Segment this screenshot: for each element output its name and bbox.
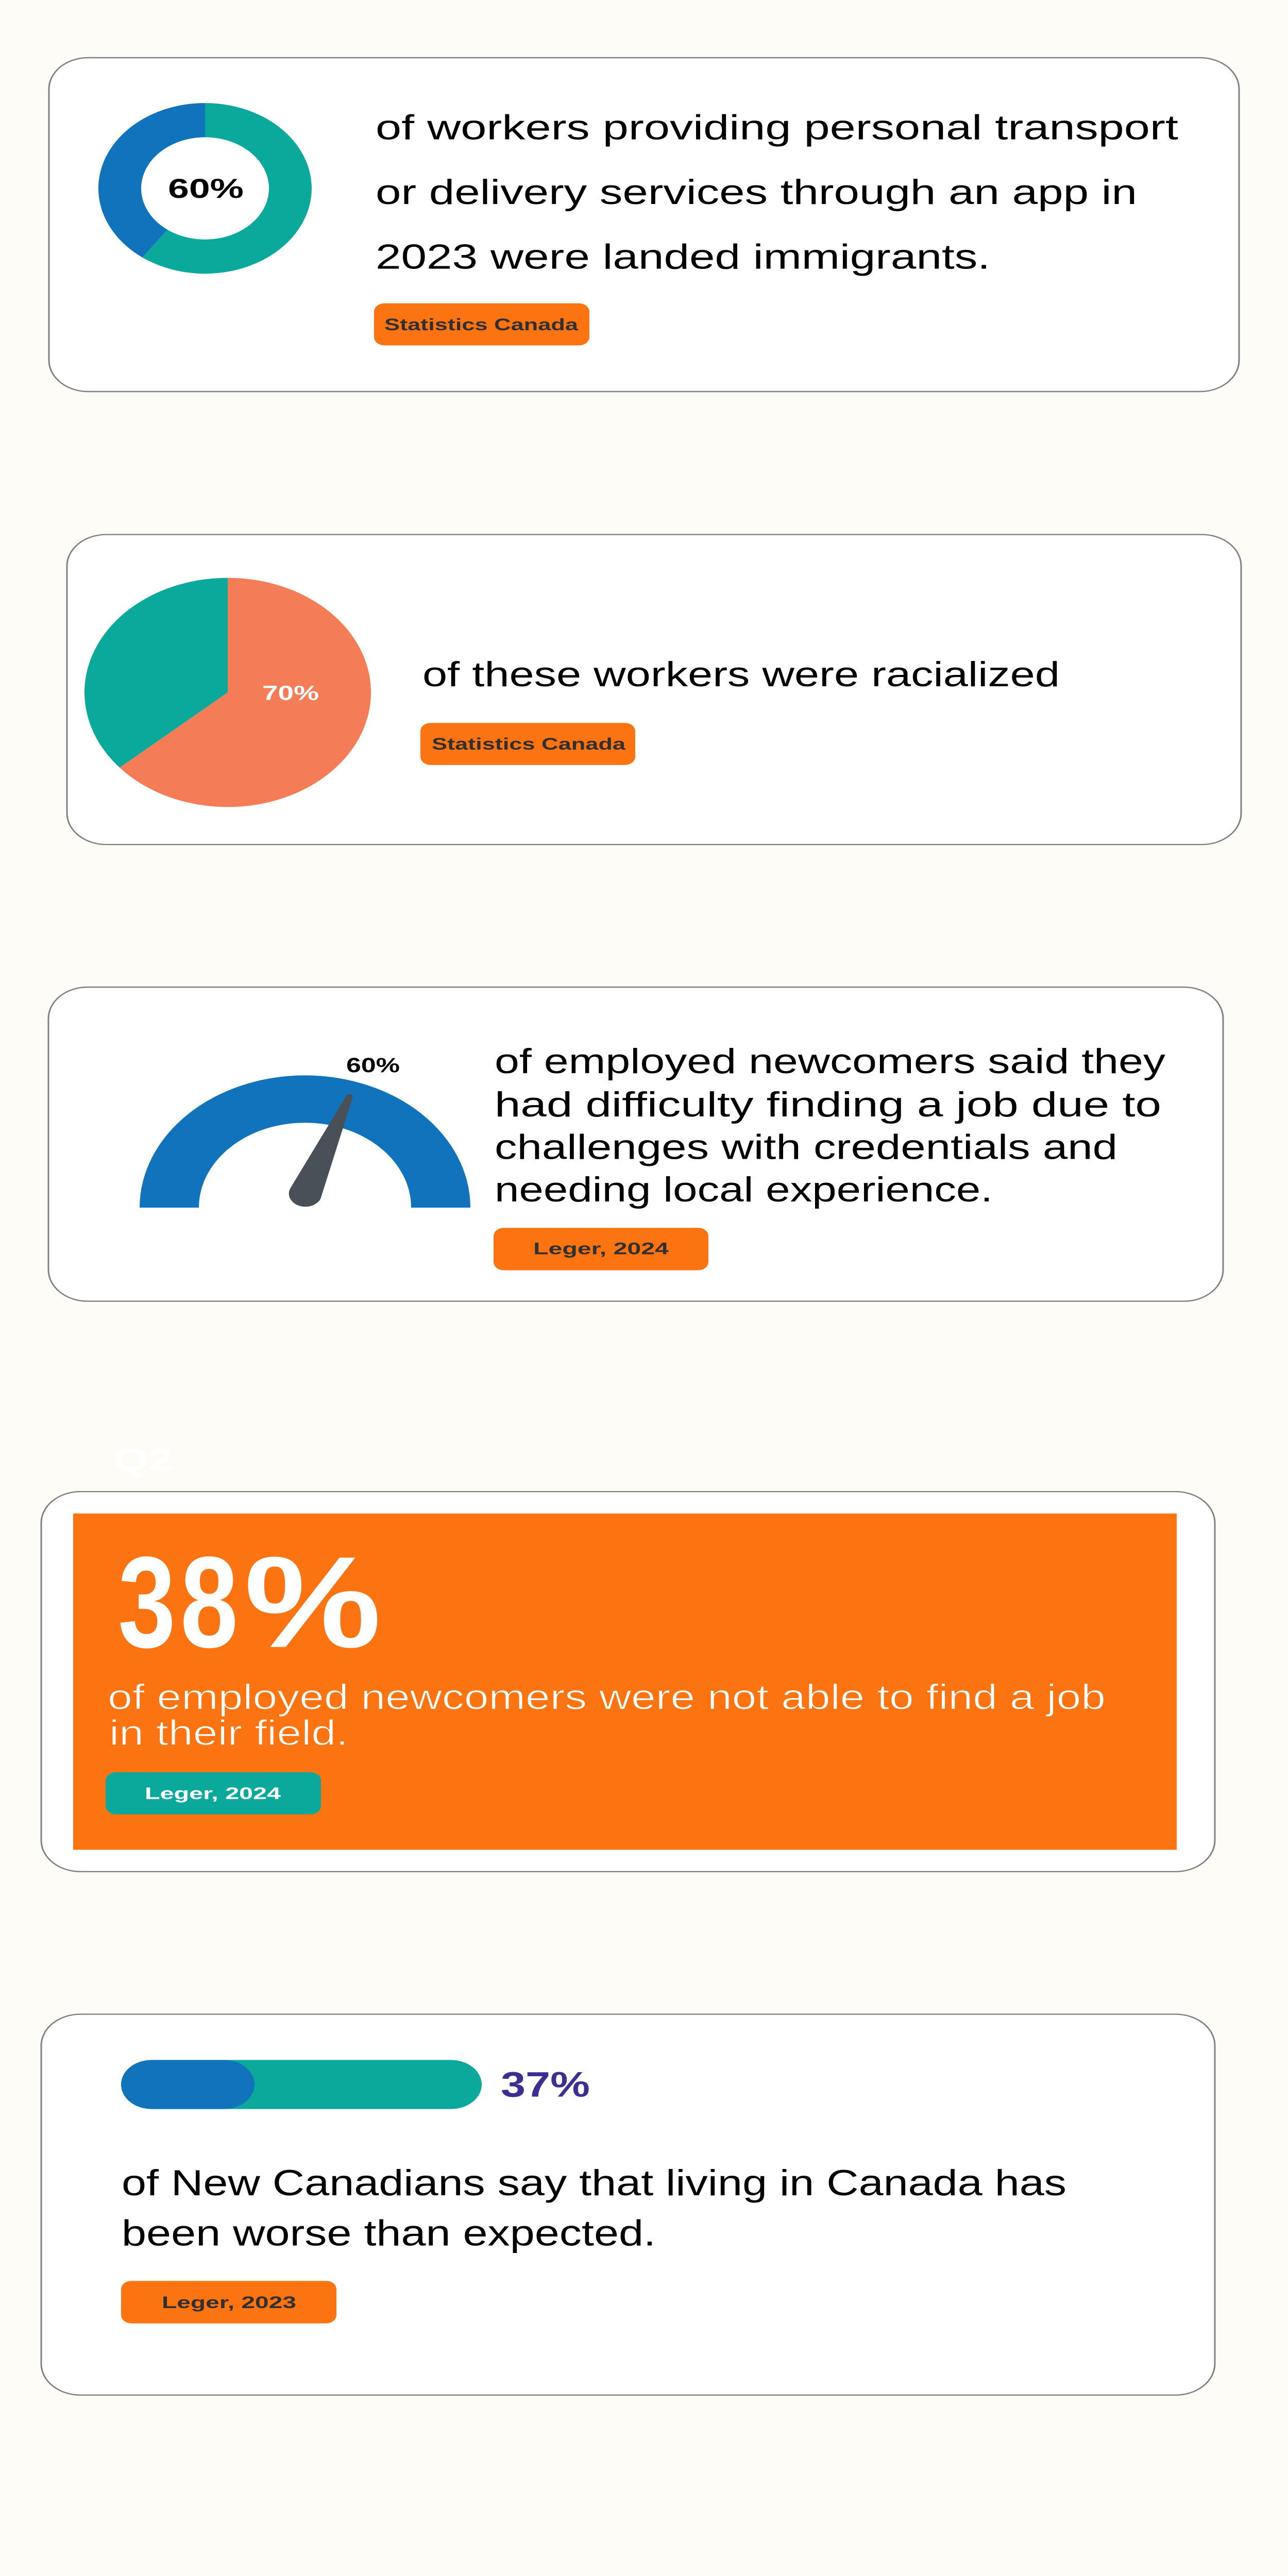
source badge: Statistics Canada: Statistics Canada [432, 734, 625, 753]
gauge chart: 60%: 60% [346, 1054, 400, 1077]
source badge: Statistics Canada: Statistics Canada [384, 315, 578, 334]
big stat: 38%: 8 [180, 1530, 238, 1675]
panel: racialized workers [67, 535, 1241, 844]
source badge: Leger 2024: Leger, 2024 [533, 1239, 669, 1258]
text: credentials statement: had difficulty finding a job due to [495, 1085, 1161, 1124]
text: racialized statement: of these workers were racialized [422, 655, 1060, 694]
text: credentials statement [495, 1042, 1166, 1209]
pie chart: 70% [84, 578, 371, 807]
source badge: Statistics Canada [420, 723, 635, 765]
panel: not able to find job in field [41, 1492, 1215, 1872]
donut chart: 60%: 60% [168, 173, 244, 204]
source badge: Leger 2023: Leger, 2023 [162, 2293, 296, 2312]
text: credentials statement: challenges with credentials and [495, 1128, 1117, 1167]
source badge: Leger 2023 [121, 2281, 336, 2324]
donut chart: 60% [98, 103, 312, 274]
text: landed immigrants statement: or delivery services through an app in [376, 173, 1137, 212]
text: landed immigrants statement [376, 108, 1178, 277]
text: worse than expected statement: been worse than expected. [122, 2213, 656, 2253]
text: worse than expected statement: of New Canadians say that living in Canada has [122, 2162, 1066, 2203]
text: job in field statement: in their field. [109, 1713, 348, 1753]
gauge chart: 60% [140, 1054, 470, 1208]
panel: credentials and local experience [48, 987, 1223, 1301]
text: worse than expected statement [122, 2162, 1066, 2253]
source badge: Leger 2024 [106, 1772, 321, 1815]
panel: app workers landed immigrants [49, 58, 1239, 392]
text: job in field statement: of employed newcomers were not able to find a job [108, 1677, 1106, 1717]
text: credentials statement: needing local experience. [495, 1170, 993, 1209]
progress bar: 37% [121, 2060, 590, 2109]
text: landed immigrants statement: 2023 were landed immigrants. [376, 238, 990, 277]
text: credentials statement: of employed newcomers said they [495, 1042, 1166, 1081]
source badge: Leger 2024: Leger, 2024 [145, 1784, 281, 1803]
pie chart: 70%: 70% [262, 681, 319, 704]
orange highlight box [73, 1514, 1177, 1850]
source badge: Statistics Canada [374, 303, 589, 345]
big stat: 38%: 3 [118, 1530, 176, 1675]
big stat: 38%: % [244, 1530, 381, 1675]
panel: worse than expected [41, 2014, 1215, 2395]
text: landed immigrants statement: of workers providing personal transport [376, 108, 1178, 147]
source badge: Leger 2024 [494, 1228, 708, 1270]
big stat: 38% [118, 1530, 381, 1675]
progress bar: 37%: 37% [501, 2065, 590, 2105]
section label: Q2: Q2 [114, 1443, 173, 1478]
text: job in field statement [108, 1677, 1106, 1753]
